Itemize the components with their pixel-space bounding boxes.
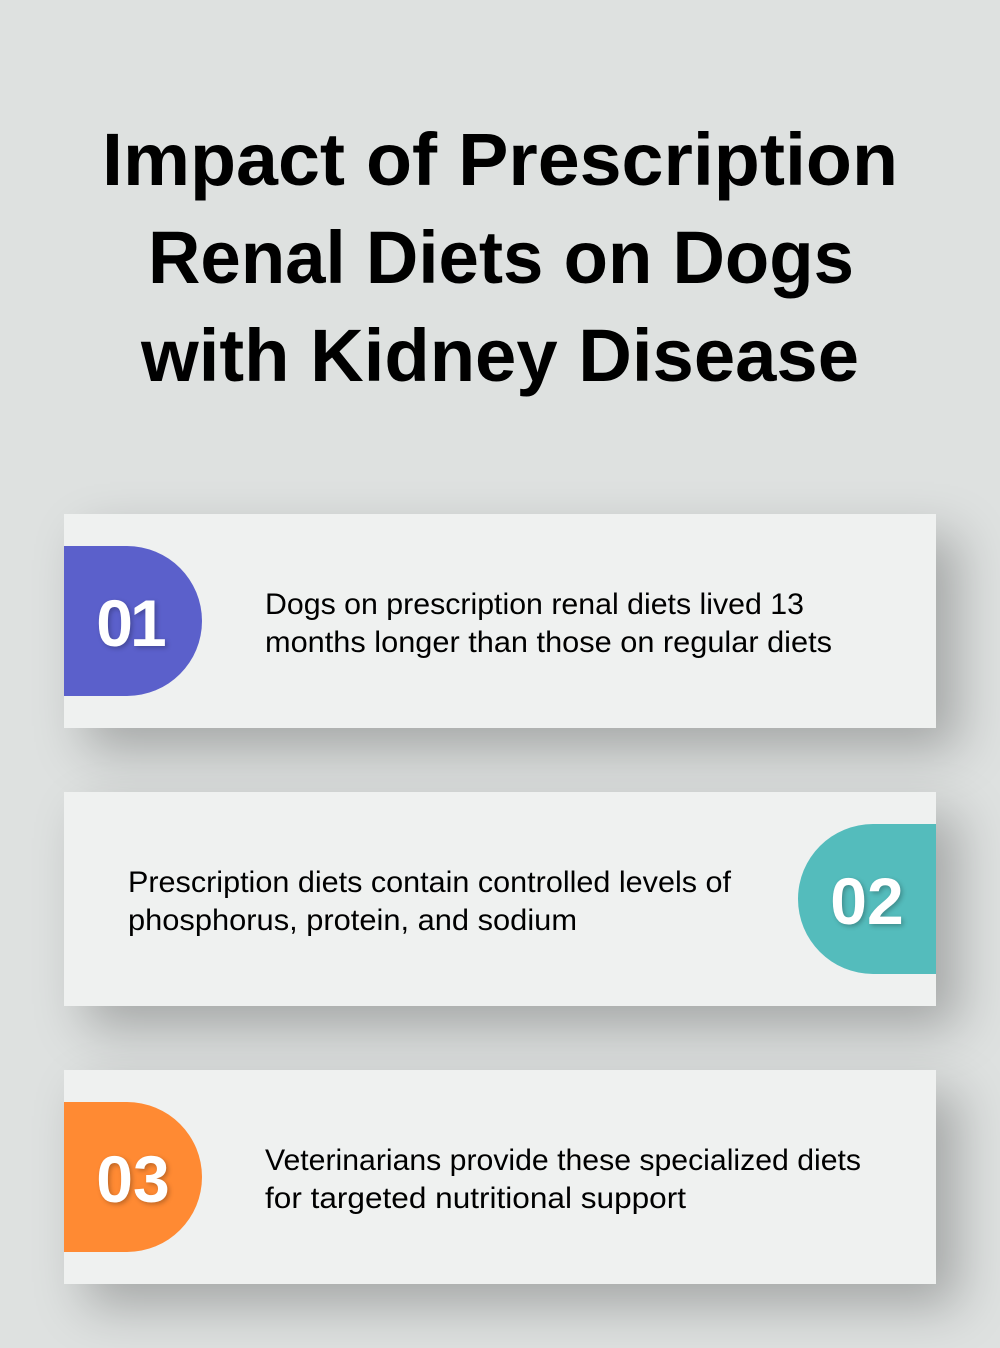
badge 01	[64, 546, 202, 696]
text: card 01: Dogs on prescription renal diets lived 13	[265, 588, 804, 621]
badge 03	[64, 1102, 202, 1252]
title: Impact of Prescription	[102, 118, 898, 201]
text: card 02	[128, 866, 732, 937]
number 01: 01	[96, 586, 164, 660]
text: card 03	[265, 1144, 861, 1215]
text: card 02: Prescription diets contain controlled levels of	[128, 866, 732, 899]
text: card 01	[265, 588, 832, 659]
panel: card 03	[64, 1070, 936, 1284]
panel: card 01	[64, 514, 936, 728]
text: card 01: months longer than those on regular diets	[265, 626, 832, 659]
badge 02	[798, 824, 936, 974]
title	[102, 118, 898, 397]
text: card 02: phosphorus, protein, and sodium	[128, 904, 577, 937]
title: Renal Diets on Dogs	[148, 216, 854, 299]
panel: card 02	[64, 792, 936, 1006]
number 02: 02	[830, 864, 904, 938]
text: card 03: Veterinarians provide these specialized diets	[265, 1144, 861, 1177]
title: with Kidney Disease	[140, 314, 859, 397]
text: card 03: for targeted nutritional support	[265, 1182, 687, 1215]
number 03: 03	[96, 1142, 170, 1216]
